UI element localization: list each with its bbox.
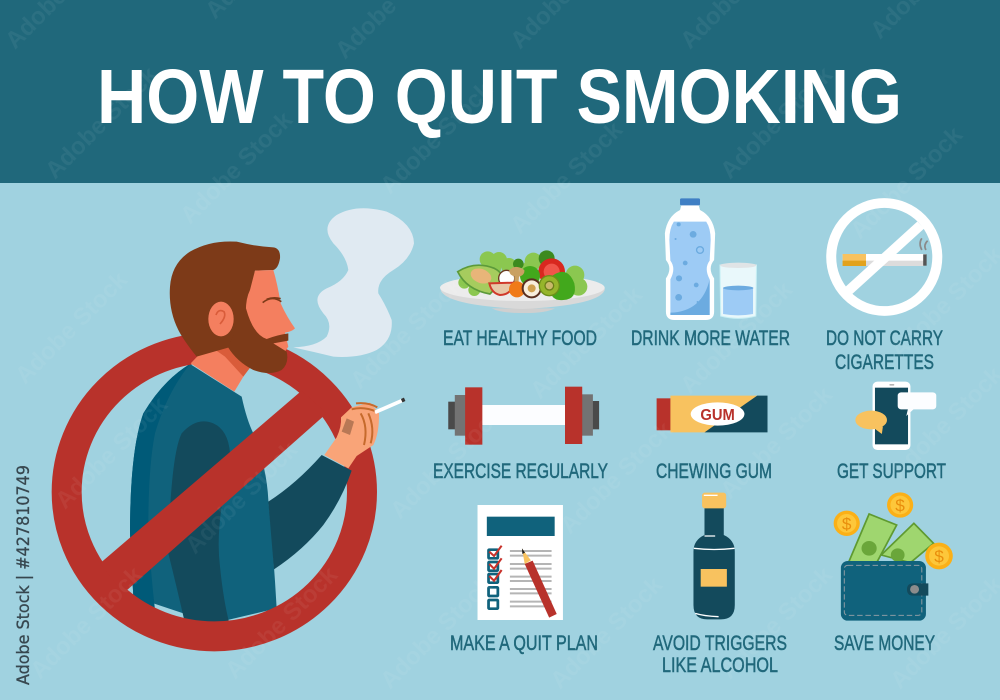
icon: quit plan checklist [478,505,563,620]
watermarks: Adobe Stock [385,401,508,524]
icon: dumbbell [448,387,599,445]
man's eye [263,298,281,303]
watermarks: Adobe Stock [180,436,303,559]
icon: alcohol bottle [693,493,735,619]
label: make a quit plan: MAKE A QUIT PLAN [450,632,598,655]
man's ear [208,302,234,336]
icon: wallet with money: $ [842,515,852,533]
watermarks: Adobe Stock [555,416,678,539]
icon: wallet with money [834,492,953,621]
man's arm [268,455,352,569]
watermarks: Adobe Stock [50,391,173,514]
icon: chewing gum pack: GUM [700,406,735,424]
label: get support: GET SUPPORT [837,460,946,483]
watermarks: Adobe Stock [845,121,968,244]
watermarks: Adobe Stock [545,571,668,694]
man's neck [191,330,253,392]
watermarks: Adobe Stock [715,381,838,504]
watermarks: Adobe Stock [175,106,298,229]
icon: smoke cloud [293,208,414,357]
label: do not carry cigarettes [826,327,943,374]
icon: plate of healthy food [440,250,605,313]
man's torso [130,364,277,623]
man's face [246,270,295,352]
man's hair [170,241,280,357]
icon: phone with chat bubbles [855,382,936,450]
label: avoid triggers like alcohol: LIKE ALCOHOL [662,654,778,677]
watermarks: Adobe Stock [505,116,628,239]
label: exercise regularly: EXERCISE REGULARLY [433,460,608,483]
prohibition ring [67,348,362,636]
watermarks: Adobe Stock [375,76,498,199]
stock image id, vertical: Adobe Stock | #427810749 [14,465,34,685]
labels for the tips [433,327,946,677]
watermarks: Adobe Stock [715,561,838,684]
icon: no cigarette sign [831,203,937,311]
hand and cigarette [324,399,405,468]
title: HOW TO QUIT SMOKING [97,54,902,140]
label: drink more water: DRINK MORE WATER [631,327,790,350]
label: save money: SAVE MONEY [834,632,935,655]
watermarks: Adobe Stock [25,561,148,684]
header band [0,0,1000,183]
watermarks: Adobe Stock [345,271,468,394]
label: do not carry cigarettes: CIGARETTES [835,351,934,374]
label: do not carry cigarettes: DO NOT CARRY [826,327,943,350]
watermarks: Adobe Stock [525,281,648,404]
label: avoid triggers like alcohol: AVOID TRIGGERS [653,632,787,655]
watermarks: Adobe Stock [40,61,163,184]
watermarks: Adobe Stock [375,571,498,694]
prohibition bar [100,391,327,593]
icon: water bottle and glass [665,198,756,320]
icon: chewing gum pack [657,396,768,432]
label: avoid triggers like alcohol [653,632,787,677]
watermarks: Adobe Stock [10,266,133,389]
icon: wallet with money: $ [895,496,905,515]
label: chewing gum: CHEWING GUM [656,460,772,483]
icon: wallet with money: $ [934,547,944,566]
label: eat healthy food: EAT HEALTHY FOOD [443,327,597,350]
watermarks: Adobe Stock [675,276,798,399]
illustration: smoking man in prohibition sign [67,208,414,636]
man's beard [228,308,288,373]
watermarks: Adobe Stock [715,61,838,184]
watermarks: Adobe Stock [220,561,343,684]
